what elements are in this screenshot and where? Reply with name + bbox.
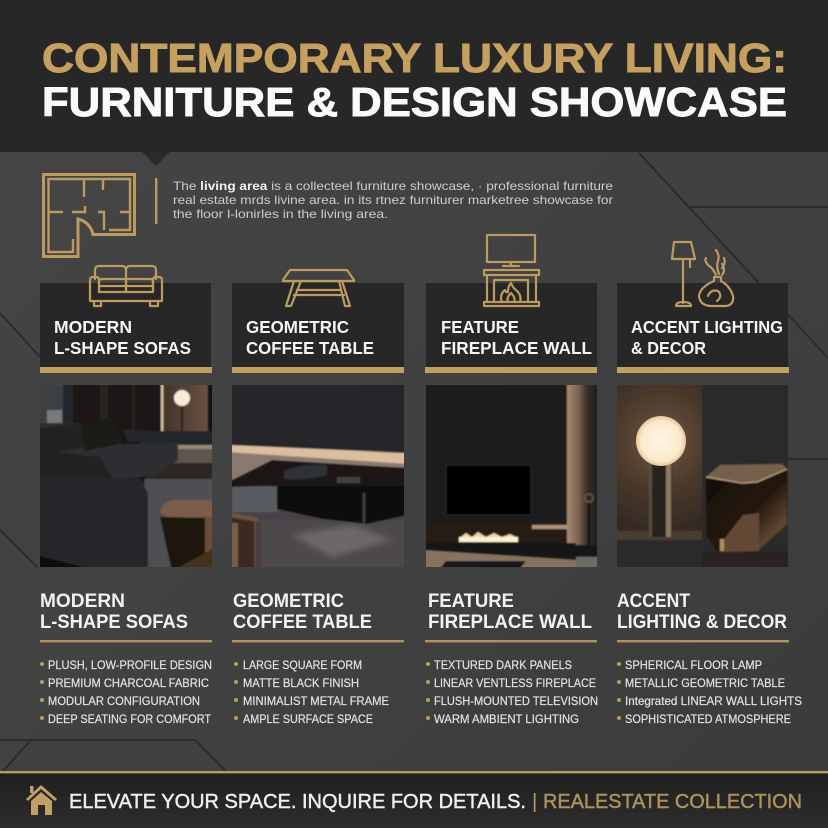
bullet list: AMPLE SURFACE SPACE bbox=[243, 712, 373, 726]
heading bbox=[428, 590, 592, 633]
bullet list: SOPHISTICATED ATMOSPHERE bbox=[625, 712, 791, 726]
label text bbox=[246, 317, 374, 358]
bullet list: MINIMALIST METAL FRAME bbox=[243, 694, 389, 708]
label text bbox=[631, 317, 783, 358]
column: sofas details bbox=[40, 590, 212, 726]
label text: FEATURE bbox=[441, 317, 519, 337]
bullet list: MATTE BLACK FINISH bbox=[243, 676, 359, 690]
icon: house bbox=[26, 785, 57, 815]
header band bbox=[0, 0, 828, 166]
column: fireplace details bbox=[425, 590, 598, 726]
icon: tv and fireplace bbox=[484, 235, 539, 306]
heading: ACCENT bbox=[617, 590, 690, 612]
intro text: The living area is a collecteel furniture showcase, · professional furniture bbox=[173, 179, 613, 193]
title: FURNITURE & DESIGN SHOWCASE bbox=[42, 79, 787, 125]
label text bbox=[441, 317, 592, 358]
photo: fireplace wall bbox=[426, 385, 597, 567]
bullet list: PREMIUM CHARCOAL FABRIC bbox=[48, 676, 209, 690]
bullet list: LINEAR VENTLESS FIREPLACE bbox=[434, 676, 596, 690]
bullet list bbox=[426, 658, 598, 726]
heading: LIGHTING & DECOR bbox=[617, 611, 787, 633]
label text: GEOMETRIC bbox=[246, 317, 349, 337]
column: table details bbox=[232, 590, 404, 726]
heading bbox=[233, 590, 372, 633]
photo: lamp and table bbox=[617, 385, 788, 567]
label text: ACCENT LIGHTING bbox=[631, 317, 783, 337]
bullet list: DEEP SEATING FOR COMFORT bbox=[48, 712, 212, 726]
bullet list: PLUSH, LOW-PROFILE DESIGN bbox=[48, 658, 212, 672]
column: lighting details bbox=[617, 590, 802, 726]
heading: FIREPLACE WALL bbox=[428, 611, 592, 633]
bullet list: METALLIC GEOMETRIC TABLE bbox=[625, 676, 785, 690]
icon: sofa bbox=[90, 266, 162, 306]
bullet list: TEXTURED DARK PANELS bbox=[434, 658, 572, 672]
panel: lighting label bbox=[617, 242, 789, 373]
heading: COFFEE TABLE bbox=[233, 611, 372, 633]
icon: floor plan bbox=[44, 174, 134, 256]
photo: coffee table bbox=[232, 385, 404, 567]
panel: table label bbox=[232, 270, 404, 373]
bullet list: WARM AMBIENT LIGHTING bbox=[434, 712, 579, 726]
photo: sofa room bbox=[40, 385, 212, 567]
label text: L-SHAPE SOFAS bbox=[54, 338, 191, 358]
bullet list bbox=[617, 658, 802, 726]
heading: FEATURE bbox=[428, 590, 514, 612]
footer text: REALESTATE COLLECTION bbox=[543, 790, 802, 813]
footer text: | bbox=[532, 790, 537, 813]
title bbox=[42, 35, 787, 125]
footer text: ELEVATE YOUR SPACE. INQUIRE FOR DETAILS. bbox=[69, 790, 526, 813]
intro text: the floor l-lonirles in the living area. bbox=[173, 207, 388, 221]
icon: coffee table bbox=[283, 270, 354, 306]
heading bbox=[40, 590, 188, 633]
intro text: real estate mrds livine area. in its rtnez furniturer marketree showcase for bbox=[173, 193, 613, 207]
intro text bbox=[173, 179, 613, 221]
label text: & DECOR bbox=[631, 338, 706, 358]
heading: L-SHAPE SOFAS bbox=[40, 611, 188, 633]
heading: GEOMETRIC bbox=[233, 590, 344, 612]
icon: lamp and vase bbox=[672, 242, 733, 306]
heading bbox=[617, 590, 787, 633]
heading: MODERN bbox=[40, 590, 125, 612]
bullet list: MODULAR CONFIGURATION bbox=[48, 694, 200, 708]
label text: FIREPLACE WALL bbox=[441, 338, 592, 358]
label text: COFFEE TABLE bbox=[246, 338, 374, 358]
bullet list: LARGE SQUARE FORM bbox=[243, 658, 362, 672]
bullet list: FLUSH-MOUNTED TELEVISION bbox=[434, 694, 598, 708]
panel: fireplace label bbox=[425, 235, 597, 373]
footer band bbox=[0, 771, 828, 828]
footer text bbox=[69, 790, 802, 813]
panel: sofas label bbox=[40, 266, 212, 373]
bullet list bbox=[234, 658, 389, 726]
intro divider bbox=[155, 178, 157, 224]
bullet list: SPHERICAL FLOOR LAMP bbox=[625, 658, 762, 672]
label text bbox=[54, 317, 191, 358]
title: CONTEMPORARY LUXURY LIVING: bbox=[42, 35, 787, 81]
label text: MODERN bbox=[54, 317, 132, 337]
bullet list: Integrated LINEAR WALL LIGHTS bbox=[625, 694, 802, 708]
bullet list bbox=[40, 658, 212, 726]
